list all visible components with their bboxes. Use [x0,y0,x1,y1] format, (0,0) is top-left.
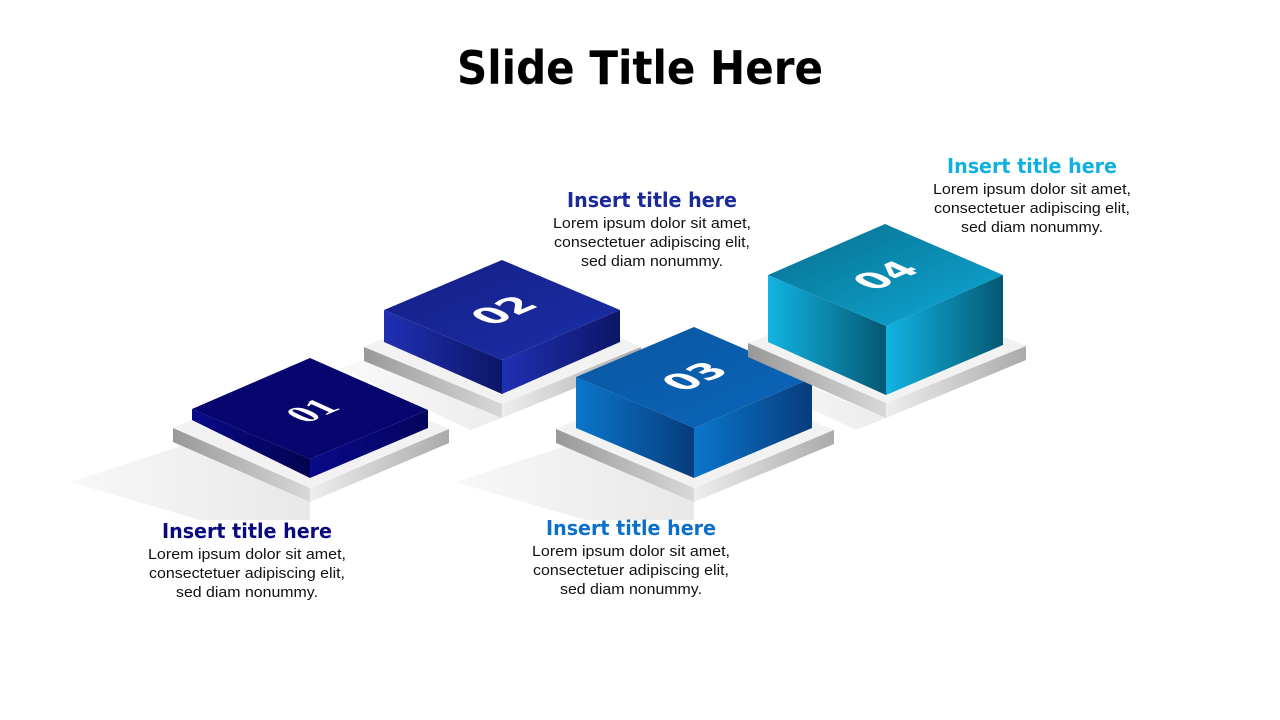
text block 3: consectetuer adipiscing elit, [533,562,729,579]
text block 1: Insert title here [162,519,332,543]
box 3: 03 [652,357,740,396]
box 4: 04 [843,256,931,295]
box 2 [384,260,620,394]
text block 2: consectetuer adipiscing elit, [554,234,750,251]
text block 1: sed diam nonummy. [176,584,318,601]
box 2: 02 [461,291,549,330]
plate 4 [748,285,1026,418]
text block 3 [532,516,730,598]
plate 3 [556,370,834,502]
box 4 [768,224,1003,395]
text block 4: sed diam nonummy. [961,219,1103,236]
text block 2: Lorem ipsum dolor sit amet, [553,215,751,232]
step 3 [556,327,834,502]
text block 2: Insert title here [567,188,737,212]
step 4 [748,224,1026,418]
text block 1: consectetuer adipiscing elit, [149,565,345,582]
box 1 [192,358,428,478]
box 3 [576,327,812,478]
title: Slide Title Here [457,41,823,95]
text block 1 [148,519,346,601]
text block 3: Lorem ipsum dolor sit amet, [532,543,730,560]
text block 2 [553,188,751,270]
text block 4: Insert title here [947,154,1117,178]
step 2 [364,260,641,418]
floor shadows [70,360,886,520]
text block 4: consectetuer adipiscing elit, [934,200,1130,217]
text block 4: Lorem ipsum dolor sit amet, [933,181,1131,198]
text block 4 [933,154,1131,236]
text block 3: Insert title here [546,516,716,540]
text block 3: sed diam nonummy. [560,581,702,598]
plate 2 [364,288,641,418]
plate 1 [173,370,449,502]
text block 2: sed diam nonummy. [581,253,723,270]
text block 1: Lorem ipsum dolor sit amet, [148,546,346,563]
box 1: 01 [275,394,350,427]
step 1 [173,358,449,502]
